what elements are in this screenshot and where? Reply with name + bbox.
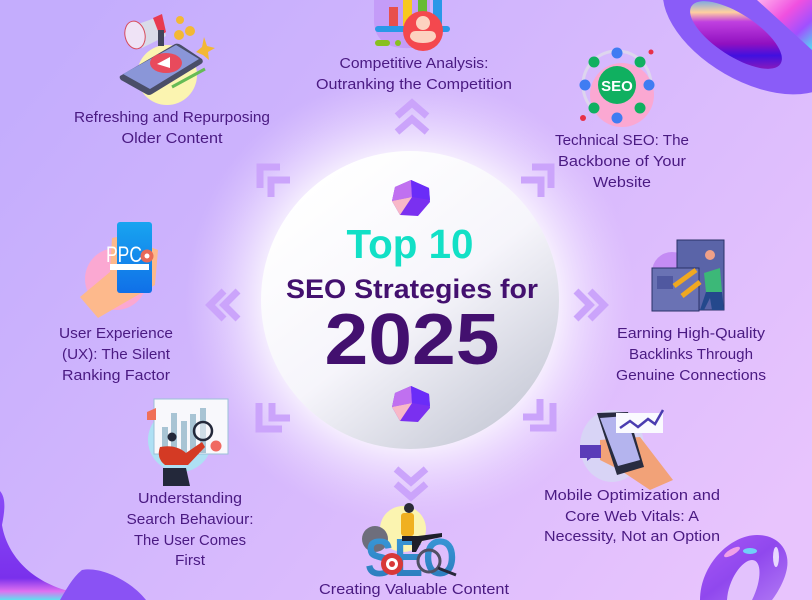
- icon: SEO letters and person: SEO: [365, 528, 457, 588]
- item: Understanding Search Behaviour: [126, 399, 254, 569]
- icon: phone in hand with PPC: [80, 222, 158, 318]
- center glow: [185, 75, 635, 525]
- icon: phone in hand with PPC: PPC: [106, 242, 142, 267]
- arrow: top-left: [260, 167, 290, 197]
- label: Competitive Analysis:: [340, 56, 488, 72]
- item: Earning Backlinks: Backlinks Through: [629, 347, 753, 363]
- label: Creating Valuable Content: [319, 582, 509, 598]
- center disc: [261, 151, 559, 449]
- item: Competitive Analysis: Outranking the Competition: [316, 77, 512, 93]
- icon: chart with user badge: [374, 0, 450, 51]
- item: Earning Backlinks: Genuine Connections: [616, 368, 766, 384]
- gem: bottom: [392, 386, 430, 422]
- label: Understanding: [138, 491, 242, 507]
- icon: megaphone and phone: [120, 14, 215, 105]
- item: Competitive Analysis: [316, 0, 512, 93]
- title line: 2025: 2025: [324, 300, 500, 380]
- icon: chain and web pages: [652, 240, 724, 311]
- icon: SEO network: [580, 48, 654, 127]
- item: Understanding Search Behaviour: First: [175, 553, 205, 569]
- icon: analyst with chart: [147, 399, 228, 486]
- item: User Experience: [59, 222, 173, 384]
- decoration: bottom-right torus: [700, 535, 787, 600]
- arrow: left: [210, 291, 238, 319]
- item: User Experience: (UX): The Silent: [62, 347, 170, 363]
- item: Technical SEO: [555, 48, 689, 191]
- icon: hand holding phone with chart: [580, 410, 673, 490]
- decoration: top-right ring: [640, 0, 812, 123]
- item: Refreshing and Repurposing: [74, 14, 270, 147]
- item: Technical SEO: Website: [593, 175, 651, 191]
- item: Understanding Search Behaviour: The User Comes: [134, 533, 246, 549]
- arrow: right: [576, 291, 604, 319]
- gem: top: [392, 180, 430, 216]
- label: Refreshing and Repurposing: [74, 110, 270, 126]
- arrow: up: [397, 103, 427, 132]
- title: [286, 221, 539, 380]
- item: Creating Valuable Content: [319, 503, 509, 598]
- label: Earning High-Quality: [617, 326, 766, 342]
- decoration: bottom-left blob: [0, 491, 146, 600]
- icon: SEO letters and person: [362, 503, 457, 588]
- item: Technical SEO: Backbone of Your: [558, 154, 686, 170]
- item: Refreshing and Repurposing: Older Content: [122, 131, 222, 147]
- item: Mobile Optimization: Core Web Vitals: A: [565, 509, 699, 525]
- item: Mobile Optimization: Necessity, Not an Option: [544, 529, 720, 545]
- label: User Experience: [59, 326, 173, 342]
- arrow: bottom-right: [523, 399, 553, 428]
- arrow: bottom-left: [259, 403, 290, 429]
- item: Earning Backlinks: [616, 240, 766, 384]
- item: Mobile Optimization: [544, 410, 720, 545]
- item: Understanding Search Behaviour: Search Behaviour:: [126, 512, 254, 528]
- icon: SEO network: SEO: [601, 78, 633, 95]
- label: Technical SEO: The: [555, 133, 689, 149]
- title line: SEO Strategies for: SEO Strategies for: [286, 274, 539, 304]
- label: Mobile Optimization and: [544, 488, 720, 504]
- arrow: top-right: [521, 167, 551, 197]
- arrow: down: [396, 469, 426, 497]
- item: User Experience: Ranking Factor: [62, 368, 170, 384]
- title line: Top 10: Top 10: [346, 221, 474, 267]
